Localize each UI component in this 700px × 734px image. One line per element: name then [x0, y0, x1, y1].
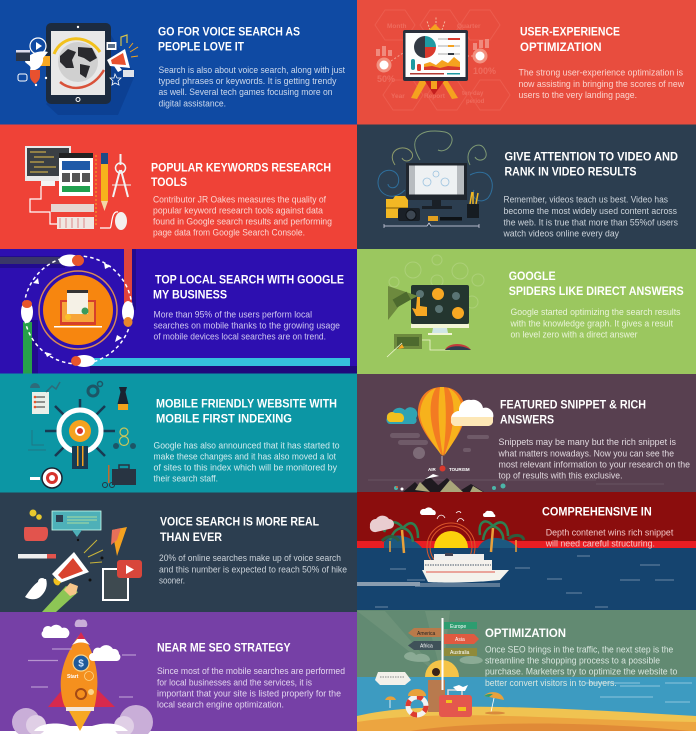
title: USER-EXPERIENCE	[520, 25, 620, 39]
body text: make these changes and it has also moved a lot	[154, 452, 336, 462]
body text: Once SEO brings in the traffic, the next step is the	[485, 644, 673, 655]
title	[504, 150, 678, 179]
panel: video results	[357, 124, 696, 249]
panel: google spiders	[357, 249, 696, 374]
body text	[157, 666, 345, 710]
body text	[498, 437, 690, 482]
panel: mobile friendly website	[0, 374, 357, 492]
panel: top local search	[0, 249, 357, 374]
body text	[503, 195, 678, 239]
title: OPTIMIZATION	[520, 40, 602, 54]
body text: of mobile devices local searches are on trend.	[154, 332, 326, 343]
body text	[545, 527, 674, 549]
body text: local search engine optimization.	[157, 700, 284, 710]
panel: user-experience optimization	[357, 0, 696, 124]
icon: megaphone and media	[18, 510, 142, 612]
body text: streamline the shopping process to a possible	[485, 656, 660, 667]
body text	[158, 65, 345, 109]
title: TOP LOCAL SEARCH WITH GOOGLE	[155, 272, 344, 286]
title	[509, 269, 684, 298]
title: FEATURED SNIPPET & RICH	[500, 398, 646, 412]
title: GIVE ATTENTION TO VIDEO AND	[504, 150, 678, 164]
body text: typed phrases or keywords. It is getting trendy	[158, 76, 337, 87]
panel: optimization	[357, 610, 696, 731]
body text: the web. It is true that more than 55%of users	[504, 217, 678, 228]
icon: presentation board: 50%	[377, 74, 395, 84]
title: MOBILE FIRST INDEXING	[156, 412, 292, 426]
body text: with the knowledge graph. It gives a result	[510, 318, 673, 329]
body text: More than 95% of the users perform local	[154, 309, 312, 320]
body text: Contributor JR Oakes measures the quality of	[153, 194, 326, 205]
body text: page data from Google Search Console.	[153, 228, 305, 238]
icon: pencils around laptop circle	[0, 249, 357, 374]
body text: now assisting in bringing the scores of new	[518, 79, 684, 90]
title: TOOLS	[151, 175, 187, 189]
body text: purchase. Marketers try to optimize the website to	[485, 667, 677, 678]
title: VOICE SEARCH IS MORE REAL	[160, 515, 319, 529]
icon: web design workspace	[25, 146, 131, 230]
icon: hot air balloon	[368, 387, 664, 492]
icon: presentation board: 100%	[473, 66, 496, 76]
panel: near me SEO strategy	[0, 612, 357, 734]
body text: digital assistance.	[158, 98, 226, 109]
title: GO FOR VOICE SEARCH AS	[158, 24, 300, 38]
illustration: beach signpost and luggage: Europe	[450, 624, 466, 630]
illustration: beach signpost and luggage: Asia	[455, 637, 465, 643]
icon: monitor with coins and banknotes	[387, 255, 484, 357]
body text: users to the very landing page.	[518, 90, 637, 101]
title: POPULAR KEYWORDS RESEARCH	[151, 160, 331, 174]
icon: presentation board	[375, 10, 510, 110]
body text: Snippets may be many but the rich snippet is	[498, 437, 676, 448]
icon: rocket launch: $	[78, 658, 84, 670]
body text: become the most widely used content across	[504, 206, 677, 217]
body text: important that your site is listed properly for the	[157, 688, 341, 700]
title	[156, 396, 337, 426]
icon: presentation board: period	[466, 99, 485, 105]
title: NEAR ME SEO STRATEGY	[157, 640, 290, 654]
title	[151, 160, 331, 189]
panel: voice search more real	[0, 492, 357, 612]
panel: popular keywords research tools	[0, 124, 357, 249]
body text: and this number is expected to reach 50% of hike	[159, 564, 347, 575]
icon: hot air balloon: TOURISM	[449, 467, 470, 472]
body text	[510, 307, 681, 340]
icon: monitor with swirls and camera	[378, 131, 492, 228]
panel: go for voice search	[0, 0, 357, 124]
body text: of sites to this index which will be monitored by	[154, 463, 337, 474]
body text: Google has also announced that it has started to	[154, 440, 340, 451]
icon: rocket launch	[12, 619, 153, 734]
body text	[159, 553, 347, 586]
body text: top of results with this exclusive.	[498, 470, 622, 482]
body text: Remember, videos teach us best. Video has	[504, 195, 668, 206]
title	[158, 24, 300, 54]
title: COMPREHENSIVE IN	[542, 504, 652, 518]
title: MOBILE FRIENDLY WEBSITE WITH	[156, 396, 337, 410]
title	[153, 272, 344, 302]
title	[500, 398, 646, 427]
body text: The strong user-experience optimization is	[518, 68, 683, 78]
icon: ship wheel and business symbols	[28, 382, 136, 488]
body text	[518, 68, 684, 101]
body text	[485, 644, 677, 689]
body text: their search staff.	[154, 474, 218, 485]
title: OPTIMIZATION	[485, 626, 566, 640]
body text: watch videos online every day	[503, 228, 619, 239]
icon: rocket launch: Start	[67, 674, 79, 680]
icon: presentation board: Year	[391, 93, 405, 100]
title	[160, 515, 319, 544]
icon: presentation board: Month	[387, 23, 407, 30]
body text	[154, 440, 340, 485]
body text: 20% of online searches make up of voice search	[159, 553, 341, 564]
body text: searches on mobile thanks to the growing usage	[154, 321, 340, 332]
body text	[154, 309, 340, 343]
icon: hot air balloon: AIR	[428, 467, 436, 472]
illustration: beach signpost and luggage: Africa	[420, 644, 433, 650]
title: RANK IN VIDEO RESULTS	[504, 165, 636, 179]
title: GOOGLE	[509, 269, 556, 283]
icon: presentation board: Report	[424, 93, 446, 100]
title: THAN EVER	[160, 530, 222, 544]
title: MY BUSINESS	[153, 288, 227, 302]
icon: tablet with globe	[16, 23, 138, 115]
title	[520, 25, 620, 54]
body text: will need careful structuring.	[545, 538, 655, 549]
body text: as well. Several tech games focusing more on	[158, 87, 332, 98]
illustration: beach signpost and luggage: Australia	[450, 650, 470, 656]
body text: popular keyword research tools against data	[153, 205, 324, 216]
body text: better convert visitors in to buyers.	[485, 678, 617, 689]
body text: Depth contenet wins rich snippet	[546, 527, 674, 538]
panel: comprehensive in	[357, 492, 696, 610]
panel: featured snippet	[357, 374, 696, 492]
body text: sooner.	[159, 576, 185, 586]
illustration: beach signpost and luggage	[357, 611, 696, 731]
icon: presentation board: ten-day	[462, 91, 484, 97]
title: PEOPLE LOVE IT	[158, 40, 245, 54]
illustration: sunset, palms and cruise ship	[357, 507, 674, 607]
illustration: beach signpost and luggage: America	[417, 631, 436, 637]
body text: Google started optimizing the search results	[510, 307, 681, 318]
body text: on level zero with a direct answer	[510, 330, 638, 340]
body text: what matters nowadays. Now you can see the	[498, 448, 674, 459]
title: SPIDERS LIKE DIRECT ANSWERS	[509, 284, 684, 298]
body text: found in Google search results and performing	[153, 216, 332, 228]
body text: Search is also about voice search, along with just	[158, 65, 345, 76]
body text: for local businesses and the services, it is	[157, 677, 312, 688]
title: ANSWERS	[500, 413, 554, 427]
icon: presentation board: Quarter	[457, 23, 481, 30]
body text: Since most of the mobile searches are performed	[157, 666, 345, 677]
body text	[153, 194, 332, 238]
